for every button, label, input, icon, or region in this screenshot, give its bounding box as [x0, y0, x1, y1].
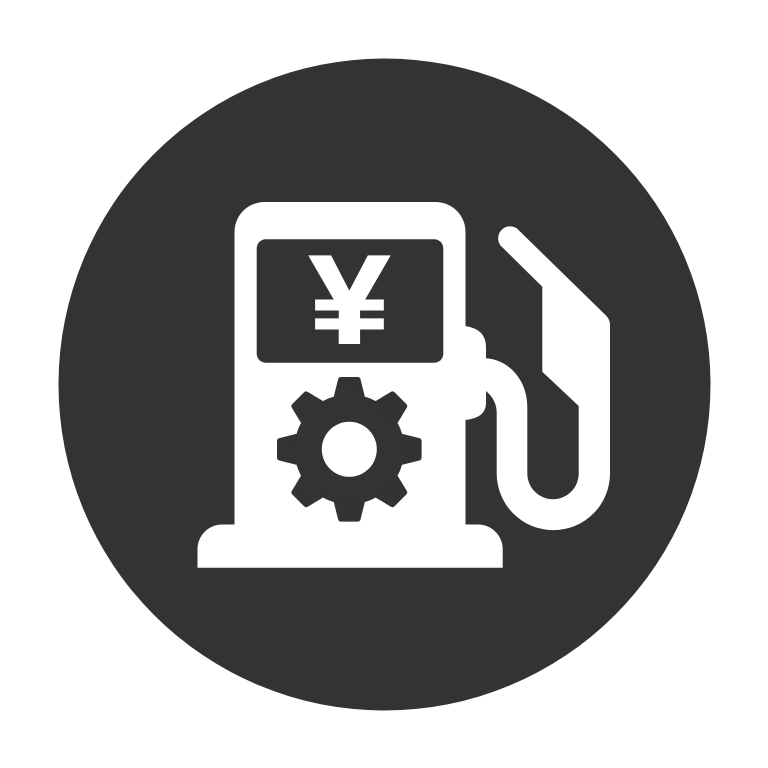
gear	[280, 380, 419, 519]
price screen	[257, 239, 443, 363]
yen symbol: ¥	[310, 229, 390, 370]
nozzle and hose	[486, 226, 610, 530]
hose connector	[465, 326, 486, 420]
icon: fuel pump	[198, 202, 610, 568]
pump body and base	[198, 202, 503, 568]
dark circular background	[58, 58, 710, 710]
